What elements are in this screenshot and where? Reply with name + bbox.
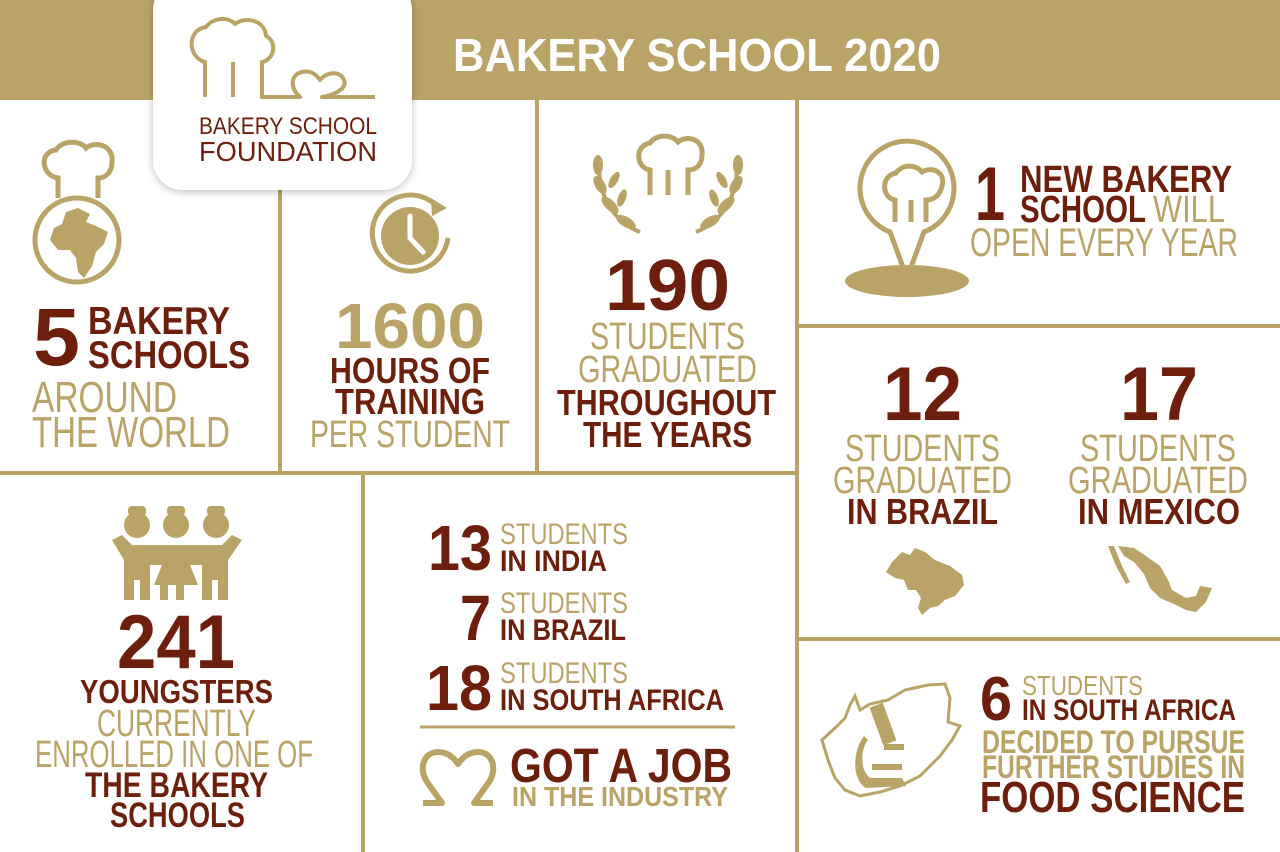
panel: Brazil and Mexico: STUDENTS [1080,428,1236,470]
icon: map pin with chef hat [845,141,969,297]
icon: chef hat globe [35,142,119,282]
panel: new bakery school every year: WILL [1153,189,1225,231]
panel: 1600 hours: TRAINING [335,381,485,422]
icon: heart [423,752,493,803]
panel: Brazil and Mexico: GRADUATED [833,460,1012,502]
panel: 5 bakery schools [32,142,250,457]
panel: 241 youngsters: SCHOOLS [110,796,245,835]
panel: students got a job [420,512,735,812]
panel: 241 youngsters: 241 [117,600,235,685]
panel: 1600 hours: PER STUDENT [310,414,510,456]
panel: 190 students [557,136,776,455]
panel: 241 youngsters: ENROLLED IN ONE OF [35,734,313,776]
panel: students got a job: IN THE INDUSTRY [512,781,728,812]
panel: Brazil and Mexico: IN BRAZIL [847,491,998,532]
panel: 5 bakery schools: AROUND [32,373,177,422]
panel: Brazil and Mexico: IN MEXICO [1078,491,1240,532]
panel: new bakery school every year: 1 [975,152,1005,237]
icon: Mexico map [1108,546,1212,612]
panel: students got a job: IN INDIA [500,545,607,578]
panel: students got a job: 18 [426,652,492,724]
icon: logo chef hat and heart [192,19,375,97]
panel: students got a job: 13 [428,512,492,584]
panel: 190 students: THROUGHOUT [557,382,776,423]
panel: 190 students: 190 [605,246,730,326]
panel: 241 youngsters: YOUNGSTERS [80,673,273,710]
panel: new bakery school every year: SCHOOL [1020,189,1146,231]
panel: 241 youngsters: THE BAKERY [85,766,268,805]
panel: 5 bakery schools: BAKERY [88,300,230,343]
panel: 5 bakery schools: SCHOOLS [88,334,250,377]
panel: students got a job: 7 [460,582,491,654]
panel: Brazil and Mexico [833,352,1248,615]
panel: 1600 hours [310,195,510,456]
icon: clock [372,195,448,271]
panel: new bakery school every year [845,141,1238,297]
logo box: FOUNDATION [199,136,377,167]
panel: 241 youngsters [35,506,313,835]
panel: South Africa food science: STUDENTS [1022,670,1143,701]
panel: Brazil and Mexico: 17 [1120,352,1198,437]
panel: 5 bakery schools: 5 [33,292,80,383]
icon: Brazil map [886,548,964,615]
panel: 1600 hours: HOURS OF [330,350,490,391]
panel: Brazil and Mexico: STUDENTS [845,428,1000,470]
panel: 190 students: GRADUATED [578,349,757,391]
panel: students got a job: STUDENTS [500,518,628,551]
panel: students got a job: GOT A JOB [510,740,732,793]
panel: South Africa food science: 6 [980,665,1012,734]
title: BAKERY SCHOOL 2020 [453,29,941,81]
panel: South Africa food science: IN SOUTH AFRICA [1022,694,1236,727]
logo box [153,0,412,190]
panel: students got a job: STUDENTS [500,587,628,620]
panel: new bakery school every year: NEW BAKERY [1020,159,1232,201]
icon: chef hat with laurels [591,136,745,232]
panel: 1600 hours: 1600 [335,290,485,362]
panel: 5 bakery schools: THE WORLD [32,408,230,457]
icon: three children [112,506,242,600]
panel: 190 students: STUDENTS [590,316,745,358]
panel: students got a job: IN BRAZIL [500,614,626,647]
header band [0,0,1280,100]
panel: students got a job: STUDENTS [500,657,628,690]
icon: South Africa map with microscope [822,684,960,796]
panel: South Africa food science [822,665,1245,822]
panel: students got a job: IN SOUTH AFRICA [500,684,724,717]
panel: 190 students: THE YEARS [583,414,752,455]
panel: Brazil and Mexico: 12 [883,352,962,437]
panel: 241 youngsters: CURRENTLY [97,703,256,745]
logo text: BAKERY SCHOOL [199,113,377,140]
